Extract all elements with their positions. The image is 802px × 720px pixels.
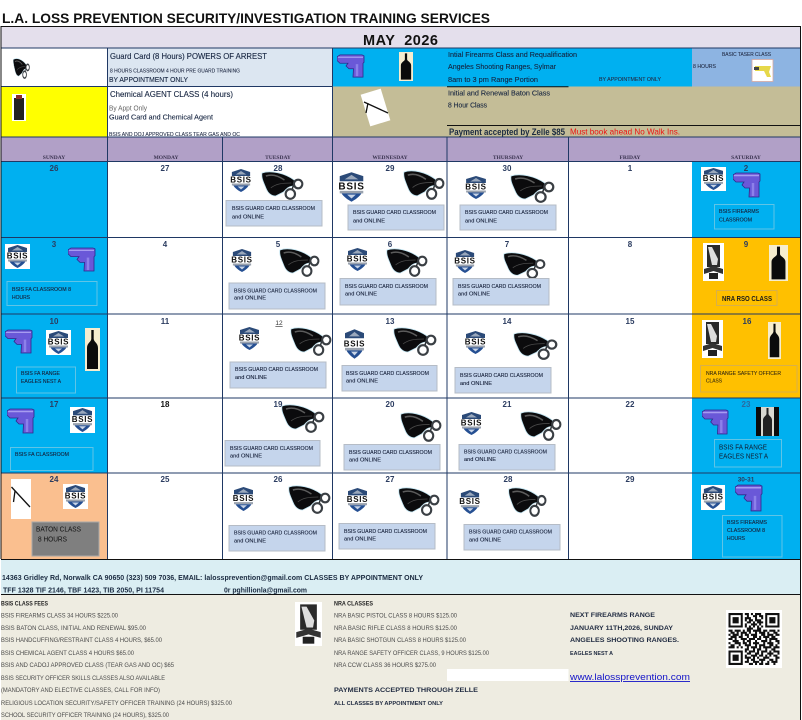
class box: BSIS GUARD CARD CLASSROOM [465, 210, 548, 216]
day cell: May 4: 4 [163, 240, 168, 249]
icon: police hat and cuffs [509, 488, 545, 516]
guard card details: 8 HOURS CLASSROOM 4 HOUR PRE GUARD TRAINING [110, 68, 240, 74]
day cell: May 2: 2 [744, 164, 749, 173]
icon: range target [756, 407, 779, 436]
day cell: May 29: 29 [626, 475, 635, 484]
class box: and ONLINE [232, 214, 264, 220]
day cell: May 24 [1, 473, 108, 559]
class box: and ONLINE [235, 375, 267, 381]
icon: police hat and cuffs [404, 171, 443, 199]
class box [722, 516, 782, 557]
day cell: April 26 [1, 162, 108, 238]
day cell: May 22 [568, 398, 692, 473]
class box: HOURS [12, 295, 30, 301]
class box: and ONLINE [234, 538, 266, 544]
icon: BSIS shield: BSIS [459, 497, 481, 506]
panel: chemical agent class [1, 86, 332, 138]
BSIS class fees list: BSIS AND CADOJ APPROVED CLASS (TEAR GAS AND OC) $65 [1, 662, 174, 669]
NRA classes list: NRA BASIC RIFLE CLASS 8 HOURS $125.00 [334, 625, 457, 632]
address and email: 14363 Gridley Rd, Norwalk CA 90650 (323) 509 7036, EMAIL: lalossprevention@gmail.com CLASSES BY APPOINTMENT ONLY [2, 575, 423, 582]
title: L.A. LOSS PREVENTION SECURITY/INVESTIGATION TRAINING SERVICES [2, 10, 490, 26]
day cell: May 17 [1, 398, 108, 473]
class box [340, 278, 436, 305]
day cell: May 18 [108, 398, 222, 473]
icon: police hat and cuffs [401, 413, 440, 441]
icon: pistol [7, 409, 34, 433]
day cell: May 1 [568, 162, 692, 238]
icon: police hat and cuffs [394, 328, 435, 355]
BSIS class fees list: RELIGIOUS LOCATION SECURITY/SAFETY OFFICER TRAINING (24 HOURS) $325.00 [1, 700, 232, 707]
day cell: May 8: 8 [628, 240, 633, 249]
day cell: May 11: 11 [161, 317, 170, 326]
icon: BSIS shield: BSIS [465, 338, 486, 346]
firearms class details: Angeles Shooting Ranges, Sylmar [448, 62, 556, 71]
day cell: May 9: 9 [744, 240, 749, 249]
class box [226, 200, 322, 226]
day cell: May 10: 10 [50, 317, 59, 326]
class box [229, 283, 325, 309]
class box: and ONLINE [345, 292, 377, 298]
day cell: May 10 [1, 314, 108, 398]
day cell: May 13: 13 [386, 317, 395, 326]
icon: range target [85, 328, 100, 371]
class box: BSIS GUARD CARD CLASSROOM [469, 530, 552, 536]
day cell: May 24: 24 [50, 475, 59, 484]
class box: and ONLINE [469, 538, 501, 544]
next firearms range block [570, 612, 679, 657]
day cell: May 22: 22 [626, 400, 635, 409]
class box: BSIS GUARD CARD CLASSROOM [353, 210, 436, 216]
firearms class details: 8am to 3 pm Range Portion [448, 75, 538, 84]
day cell: April 30: 30 [503, 164, 512, 173]
guard card heading: Guard Card (8 Hours) POWERS OF ARREST [110, 51, 267, 61]
class box: BSIS GUARD CARD CLASSROOM [458, 284, 541, 290]
icon: pistol [733, 173, 760, 197]
day cell: May 5 [222, 238, 332, 314]
class box: BSIS FIREARMS [727, 520, 767, 526]
day cell: April 27 [108, 162, 222, 238]
next firearms range block: EAGLES NEST A [570, 651, 614, 657]
day cell: April 26: 26 [50, 164, 59, 173]
icon: BSIS shield: BSIS [465, 182, 487, 192]
icon: range target [768, 322, 781, 359]
class box [455, 368, 551, 393]
BSIS class fees list: BSIS HANDCUFFING/RESTRAINT CLASS 4 HOURS, $65.00 [1, 637, 162, 644]
day cell: May 5: 5 [276, 240, 281, 249]
class box: NRA RSO CLASS [722, 294, 772, 303]
license numbers: TFF 1328 TIF 2146, TBF 1423, TIB 2050, PI 11754 [3, 588, 164, 594]
icon: range target [769, 245, 788, 281]
class box [700, 366, 797, 392]
BSIS class fees list: BSIS BATON CLASS, INITIAL AND RENEWAL $95.00 [1, 625, 146, 632]
icon: BSIS shield: BSIS [347, 254, 368, 264]
icon: baton [11, 479, 31, 519]
day cell: May 13 [332, 314, 447, 398]
class box [714, 204, 774, 229]
day cell: May 20: 20 [386, 400, 395, 409]
NRA classes list: NRA CLASSES [334, 600, 374, 608]
icon: police hat and cuffs [514, 333, 556, 359]
icon: pistol [735, 485, 762, 511]
firearms class details: BY APPOINTMENT ONLY [599, 77, 661, 83]
class box: and ONLINE [346, 378, 378, 384]
next firearms range block: NEXT FIREARMS RANGE [570, 612, 656, 619]
icon: BSIS shield: BSIS [230, 176, 252, 184]
day cell: April 27: 27 [161, 164, 170, 173]
icon: police hat and cuffs [280, 249, 318, 276]
icon: police hat and handcuffs [13, 59, 29, 78]
icon: BSIS shield: BSIS [347, 495, 368, 504]
icon: NRA badge [702, 320, 723, 358]
day cell: May 27 [332, 473, 447, 559]
class box: EAGLES NEST A [719, 454, 768, 460]
day cell: May 30-31 [692, 473, 800, 559]
payment note: ALL CLASSES BY APPOINTMENT ONLY [334, 701, 443, 707]
day cell: May 26 [222, 473, 332, 559]
BSIS class fees list: BSIS SECURITY OFFICER SKILLS CLASSES ALSO AVAILABLE [1, 675, 166, 682]
day cell: April 28: 28 [274, 164, 283, 173]
class box: BSIS GUARD CARD CLASSROOM [234, 530, 317, 536]
class box: BSIS FA CLASSROOM [15, 452, 69, 458]
day cell: May 26: 26 [274, 475, 283, 484]
day cell: April 29: 29 [386, 164, 395, 173]
icon: police hat and cuffs [511, 175, 553, 202]
guard card appointment note: BY APPOINTMENT ONLY [109, 75, 188, 84]
panel: firearms class [332, 48, 692, 86]
day cell: May 19: 19 [274, 400, 283, 409]
icon: BSIS shield: BSIS [461, 418, 482, 428]
class box: BSIS GUARD CARD CLASSROOM [235, 367, 318, 373]
weekday header row: FRIDAY [620, 155, 640, 161]
class box: and ONLINE [460, 381, 492, 387]
day cell: April 30 [447, 162, 568, 238]
website link: www.lalossprevention.com [569, 672, 690, 682]
class box [7, 282, 97, 306]
weekday header row: SATURDAY [731, 155, 761, 161]
weekday header row: SUNDAY [43, 155, 65, 161]
QR code [726, 610, 782, 668]
chemical agent text: Chemical AGENT CLASS (4 hours) [110, 89, 233, 99]
class box: BSIS FA RANGE [21, 371, 60, 377]
class box: 8 HOURS [38, 536, 67, 544]
day cell: May 8 [568, 238, 692, 314]
baton class details [448, 88, 550, 110]
icon: police hat and cuffs [291, 328, 330, 355]
class box: BSIS GUARD CARD CLASSROOM [345, 284, 428, 290]
panel: baton class [332, 86, 800, 137]
panel: guard card class [1, 48, 332, 86]
class box: CLASSROOM 8 [727, 528, 765, 534]
class box [460, 205, 556, 230]
alternate email: 0r pghillionla@gmail.com [224, 588, 307, 594]
day cell: May 25: 25 [161, 475, 170, 484]
class box: NRA RANGE SAFETY OFFICER [706, 371, 781, 377]
class box: and ONLINE [349, 458, 381, 464]
icon: pepper spray [12, 94, 26, 121]
next firearms range block: ANGELES SHOOTING RANGES. [570, 637, 679, 644]
class box: BSIS GUARD CARD CLASSROOM [232, 206, 315, 212]
weekday header row: TUESDAY [265, 155, 291, 161]
firearms class details [448, 50, 661, 84]
chemical agent text: BSIS AND DOJ APPROVED CLASS TEAR GAS AND OC [109, 132, 240, 138]
class box: BSIS GUARD CARD CLASSROOM [464, 450, 547, 456]
class box [339, 524, 435, 549]
chemical agent text: Guard Card and Chemical Agent [109, 112, 214, 122]
icon: BSIS shield: BSIS [231, 256, 253, 264]
class box: and ONLINE [464, 457, 496, 463]
icon: police hat and cuffs [282, 405, 323, 432]
class box [459, 444, 555, 470]
day cell: May 6 [332, 238, 447, 314]
class box: BSIS GUARD CARD CLASSROOM [349, 450, 432, 456]
icon: BSIS shield: BSIS [454, 256, 476, 266]
day cell: May 16: 16 [743, 317, 752, 326]
blank white cell [447, 669, 568, 681]
day cell: May 7 [447, 238, 568, 314]
BSIS class fees list: BSIS CHEMICAL AGENT CLASS 4 HOURS $65.00 [1, 650, 134, 657]
class box: BSIS GUARD CARD CLASSROOM [460, 373, 543, 379]
day cell: May 19 [222, 398, 332, 473]
NRA classes list [334, 600, 489, 669]
payment note: PAYMENTS ACCEPTED THROUGH ZELLE [334, 687, 479, 694]
class box: BSIS FA RANGE [719, 444, 767, 452]
class box: BSIS GUARD CARD CLASSROOM [344, 529, 427, 535]
icon: police hat and cuffs [504, 253, 544, 278]
payment note: Payment accepted by Zelle $85 [449, 127, 565, 137]
chemical agent text: By Appt Only [109, 104, 147, 112]
day cell: May 9 [692, 238, 800, 314]
icon: BSIS shield: BSIS [338, 182, 365, 192]
class box [225, 440, 320, 466]
icon: BSIS shield: BSIS [72, 415, 93, 424]
icon: BSIS shield: BSIS [702, 492, 724, 502]
day cell: May 1: 1 [628, 164, 633, 173]
panel: taser class [692, 48, 800, 86]
chemical agent text [109, 89, 240, 138]
NRA classes list: NRA BASIC PISTOL CLASS 8 HOURS $125.00 [334, 612, 457, 620]
NRA classes list: NRA BASIC SHOTGUN CLASS 8 HOURS $125.00 [334, 637, 466, 644]
day cell: May 23 [692, 398, 800, 473]
fees panel background [1, 595, 800, 720]
icon: police hat and cuffs [262, 172, 302, 199]
icon: range target [399, 52, 413, 81]
NRA classes list: NRA RANGE SAFETY OFFICER CLASS, 9 HOURS $125.00 [334, 650, 489, 657]
icon: BSIS shield: BSIS [7, 252, 28, 260]
class box [348, 205, 444, 230]
class box: and ONLINE [234, 296, 266, 302]
day cell: May 2 [692, 162, 800, 238]
icon: pistol [68, 248, 95, 271]
class box [229, 526, 325, 551]
icon: NRA badge [295, 602, 322, 646]
class box: and ONLINE [465, 218, 497, 224]
weekday header row: MONDAY [154, 155, 178, 161]
icon: BSIS shield: BSIS [239, 334, 260, 342]
BSIS class fees list: (MANDATORY AND ELECTIVE CLASSES, CALL FOR INFO) [1, 687, 160, 694]
day cell: May 4 [108, 238, 222, 314]
day cell: May 21: 21 [503, 400, 512, 409]
contact band [1, 560, 800, 594]
class box [344, 444, 440, 470]
icon: pistol [337, 55, 364, 77]
day cell: May 27: 27 [386, 475, 395, 484]
baton class details: 8 Hour Class [448, 100, 487, 110]
next firearms range block: JANUARY 11TH,2026, SUNDAY [570, 625, 674, 632]
class box: CLASSROOM [719, 218, 752, 224]
icon: baton [361, 89, 390, 126]
class box: BSIS GUARD CARD CLASSROOM [346, 371, 429, 377]
booking warning: Must book ahead No Walk Ins. [570, 126, 680, 136]
icon: NRA badge [703, 243, 724, 281]
day cell: April 28 [222, 162, 332, 238]
day cell: May 12: 12 [275, 320, 283, 327]
day cell: May 18: 18 [161, 400, 170, 409]
class box: and ONLINE [458, 292, 490, 298]
day cell: May 21 [447, 398, 568, 473]
icon: pistol [5, 330, 32, 353]
icon: pistol [702, 410, 728, 434]
icon: BSIS shield: BSIS [233, 494, 254, 503]
class box: BATON CLASS [36, 526, 81, 534]
BSIS class fees list: SCHOOL SECURITY OFFICER TRAINING (24 HOURS), $325.00 [1, 712, 169, 719]
day cell: May 15: 15 [626, 317, 635, 326]
class box: BSIS GUARD CARD CLASSROOM [234, 288, 317, 294]
day cell: May 15 [568, 314, 692, 398]
weekday header row: THURSDAY [493, 155, 523, 161]
class box: EAGLES NEST A [21, 379, 61, 385]
icon: police hat and cuffs [399, 488, 438, 515]
day cell: May 3: 3 [52, 240, 57, 249]
weekday header row: WEDNESDAY [372, 155, 408, 161]
day cell: May 30-31: 30-31 [738, 476, 755, 484]
class box [342, 366, 437, 391]
icon: BSIS shield: BSIS [48, 338, 69, 346]
NRA classes list: NRA CCW CLASS 36 HOURS $275.00 [334, 662, 436, 669]
class box [16, 367, 76, 393]
panel: taser class: BASIC TASER CLASS [722, 52, 771, 58]
day cell: May 14: 14 [503, 317, 512, 326]
day cell: May 14 [447, 314, 568, 398]
payment note [334, 687, 479, 707]
class box [32, 522, 99, 556]
class box [714, 440, 782, 467]
class box: BSIS FA CLASSROOM 8 [12, 287, 71, 293]
icon: BSIS shield: BSIS [65, 492, 86, 500]
day cell: May 28: 28 [504, 475, 513, 484]
icon: police hat and cuffs [521, 412, 560, 440]
day cell: May 12 [222, 314, 332, 398]
class box: BSIS FIREARMS [719, 209, 759, 215]
icon: BSIS shield: BSIS [703, 174, 724, 183]
month banner: MAY 2026 [363, 33, 438, 49]
day cell: May 7: 7 [505, 240, 510, 249]
BSIS class fees list: BSIS FIREARMS CLASS 34 HOURS $225.00 [1, 612, 118, 620]
icon: taser [752, 60, 773, 82]
class box: and ONLINE [344, 536, 376, 542]
day cell: May 28 [447, 473, 568, 559]
day cell: May 11 [108, 314, 222, 398]
class box: and ONLINE [230, 454, 262, 460]
BSIS class fees list [1, 600, 232, 719]
day cell: May 17: 17 [50, 400, 59, 409]
baton class details: Initial and Renewal Baton Class [448, 88, 550, 98]
firearms class details: Intial Firearms Class and Requalification [448, 50, 577, 59]
class box [230, 362, 326, 388]
icon: BSIS shield: BSIS [344, 340, 365, 348]
class box: and ONLINE [353, 218, 385, 224]
class box: BSIS GUARD CARD CLASSROOM [230, 446, 313, 452]
day cell: May 16 [692, 314, 800, 398]
weekday header row [1, 137, 800, 162]
class box [464, 524, 560, 550]
icon: police hat and cuffs [387, 249, 426, 276]
icon: police hat and cuffs [289, 486, 329, 513]
day cell: May 23: 23 [742, 400, 751, 409]
day cell: May 3 [1, 238, 108, 314]
class box: HOURS [727, 536, 745, 542]
day cell: May 25 [108, 473, 222, 559]
day cell: April 29 [332, 162, 447, 238]
class box: CLASS [706, 378, 722, 384]
BSIS class fees list: BSIS CLASS FEES [1, 600, 49, 608]
contact band borders [1, 560, 800, 594]
panel: taser class: 8 HOURS [693, 64, 716, 70]
day cell: May 29 [568, 473, 692, 559]
class box [453, 278, 549, 305]
day cell: May 20 [332, 398, 447, 473]
month banner [1, 27, 800, 49]
day cell: May 6: 6 [388, 240, 393, 249]
